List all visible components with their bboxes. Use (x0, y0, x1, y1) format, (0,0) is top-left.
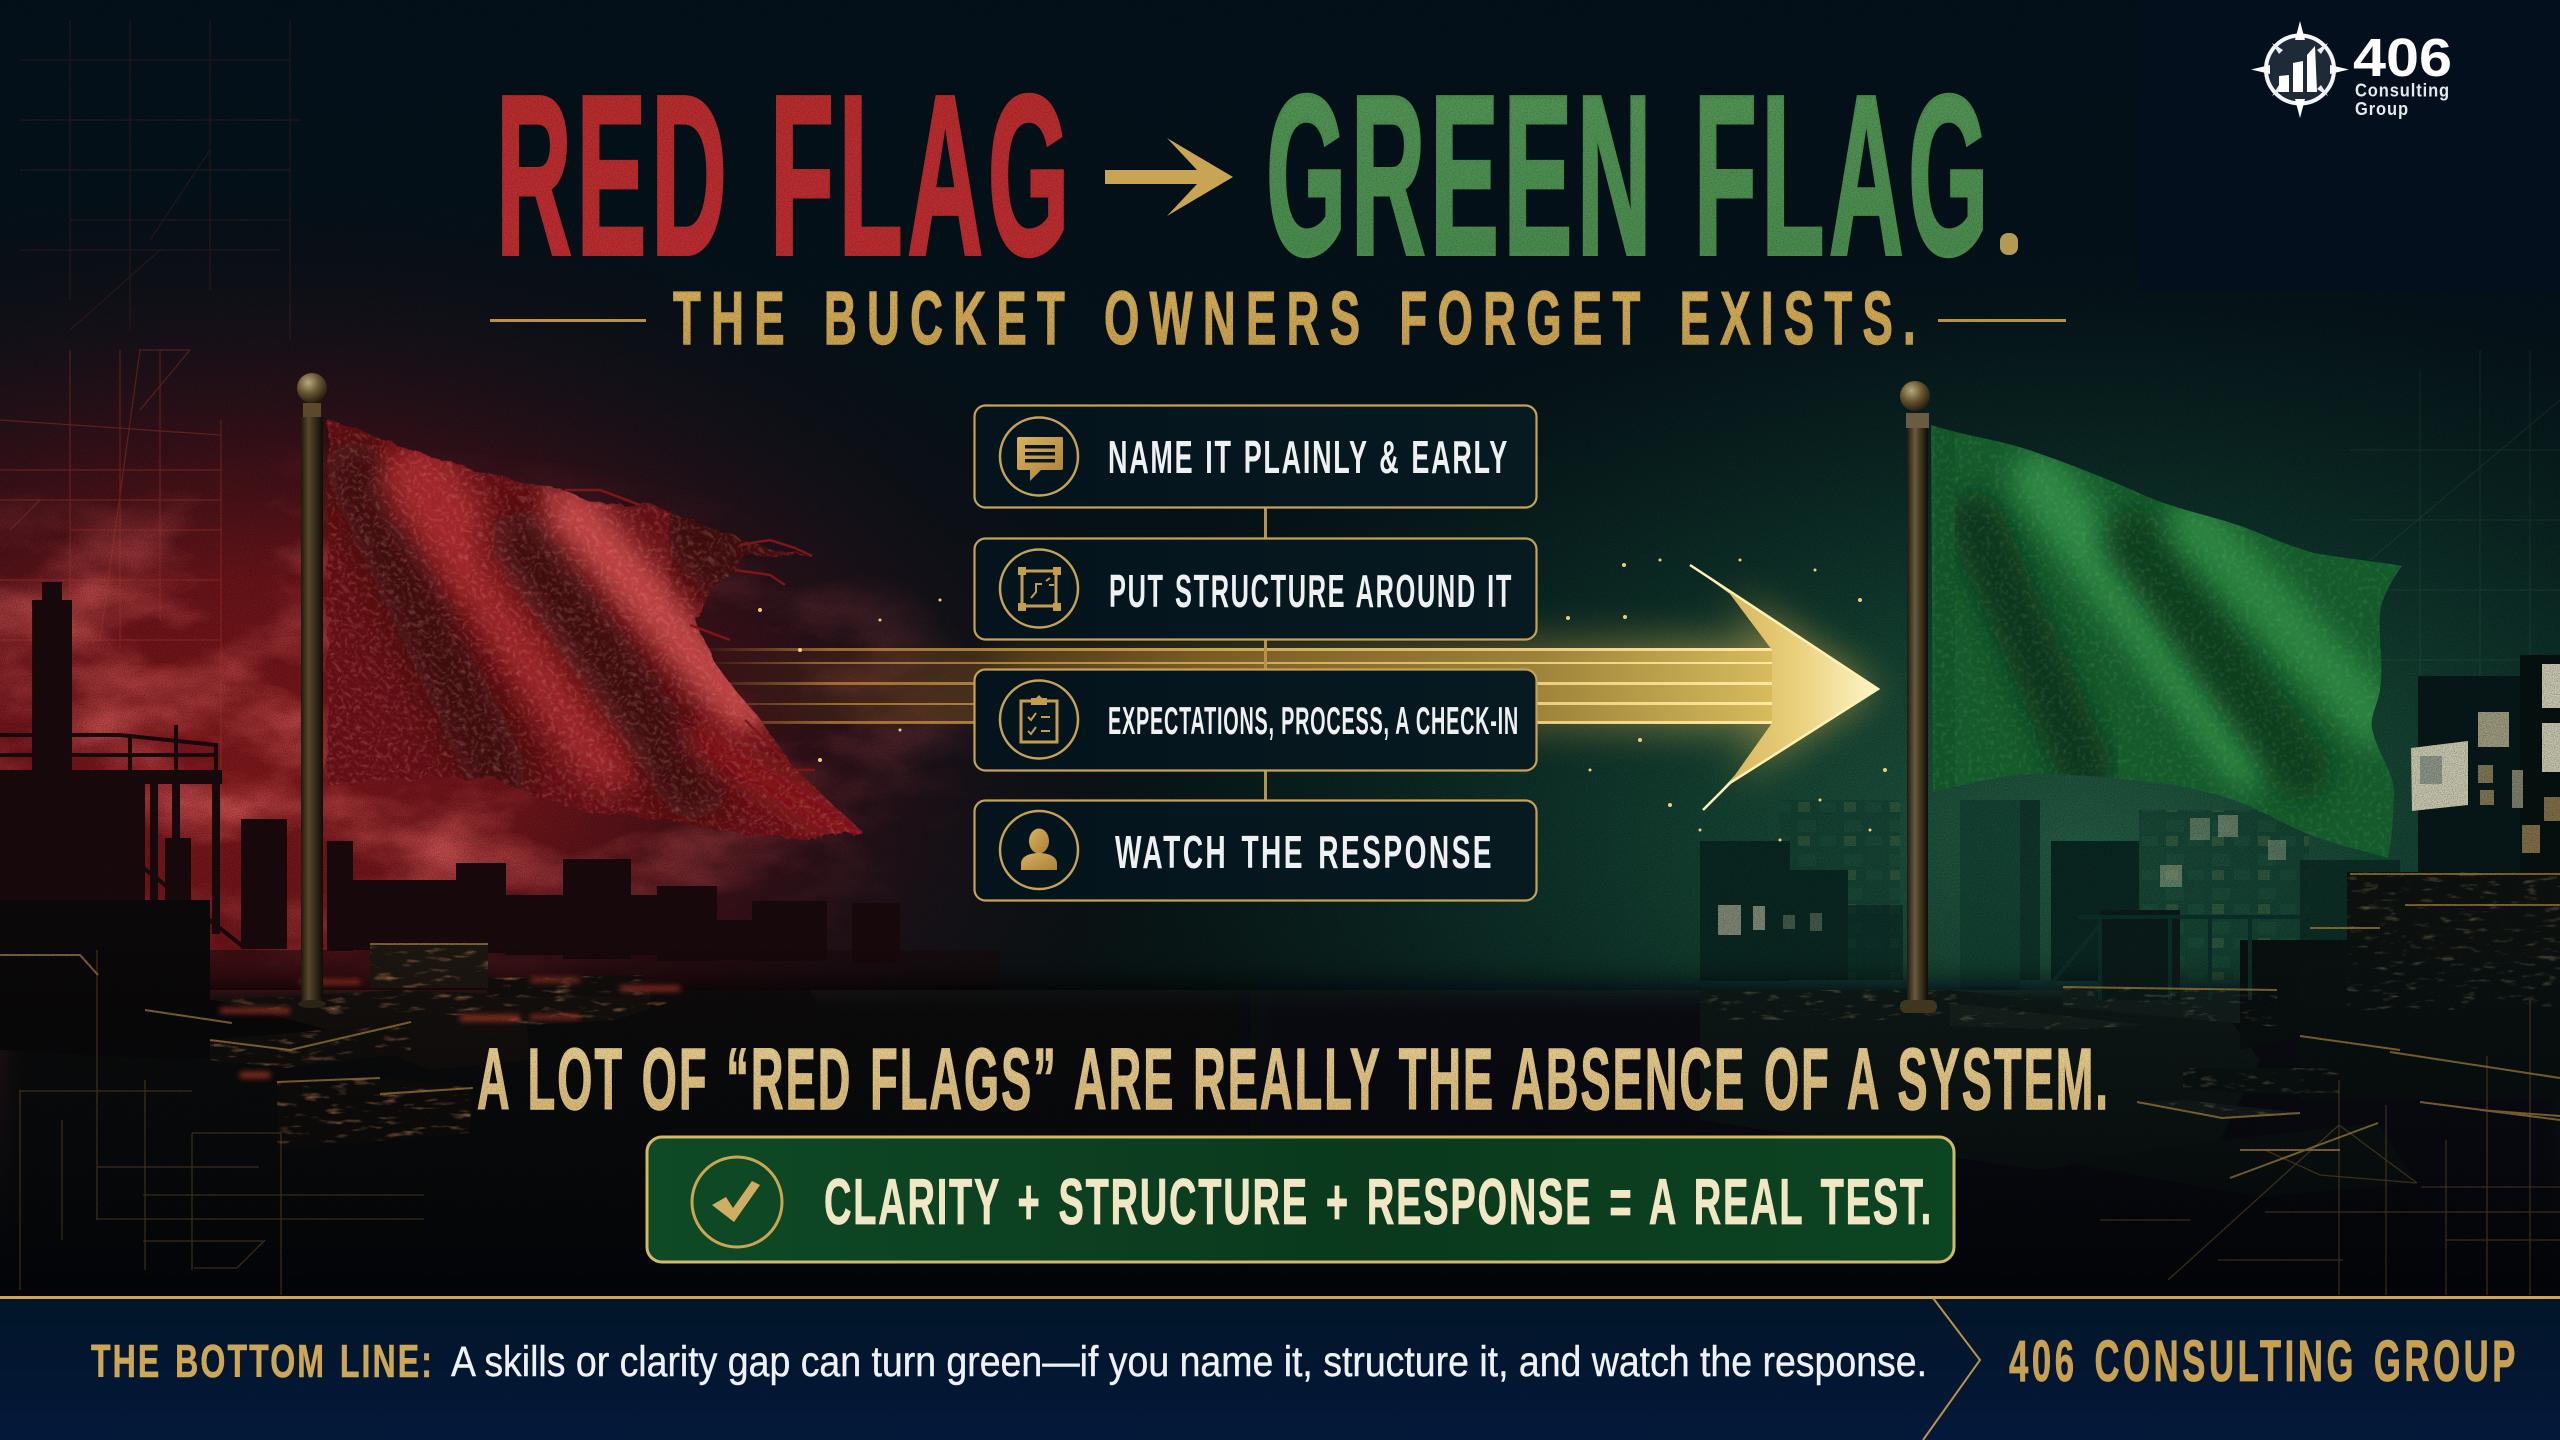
title arrow (1105, 138, 1233, 216)
step card: structure (974, 538, 1536, 640)
icon: structure frame (1000, 550, 1078, 628)
paper posters in green city (1718, 815, 2286, 935)
step card: response (974, 800, 1536, 900)
right foreground blocks (1250, 872, 2560, 1320)
block surface texture (210, 945, 668, 1144)
bottom line label: THE BOTTOM LINE: (91, 1335, 434, 1387)
green flag cloth (1920, 420, 2410, 870)
bottom line sentence: A skills or clarity gap can turn green—if you name it, structure it, and watch the response. (451, 1338, 1927, 1386)
step connectors (1264, 508, 1267, 801)
right wall with notices (2411, 655, 2560, 876)
chevron divider (1923, 1298, 1980, 1440)
left platform railings (0, 610, 245, 948)
logo: Consulting (2355, 80, 2450, 100)
blueprint lines: left (0, 350, 221, 840)
step text: EXPECTATIONS, PROCESS, A CHECK-IN (1108, 700, 1519, 743)
step card: expectations (974, 670, 1536, 770)
gold particles (758, 558, 1887, 842)
logo text: 406 (2353, 28, 2452, 88)
subtitle (490, 276, 2066, 360)
green flag (1900, 381, 2410, 1013)
ember highlights on red blocks (220, 978, 680, 1078)
logo: Group (2355, 98, 2409, 119)
icon: check circle (692, 1157, 782, 1247)
green city silhouette (1700, 800, 2400, 990)
icon: person (1000, 811, 1078, 889)
title period (2000, 233, 2018, 255)
logo (2251, 21, 2452, 119)
step text: PUT STRUCTURE AROUND IT (1109, 565, 1513, 617)
right railing (2050, 917, 2305, 1000)
red flag pole (297, 373, 327, 1008)
formula callout (647, 1137, 1954, 1262)
lower blueprint lines (20, 950, 2560, 1295)
red flag tattered strands (565, 490, 815, 770)
step card: name it (974, 406, 1536, 508)
green flag pole (1900, 381, 1937, 1013)
right blueprint lines (2350, 350, 2560, 680)
logo panel background (2140, 0, 2560, 292)
left foreground blocks (0, 900, 1250, 1320)
title: red flag to green flag: RED FLAG (496, 49, 1074, 303)
step text: NAME IT PLAINLY & EARLY (1108, 431, 1509, 483)
step text: WATCH THE RESPONSE (1115, 826, 1494, 878)
bottom banner (0, 1296, 2560, 1440)
logo compass (2251, 21, 2349, 118)
flow arrow: gold (700, 558, 1887, 842)
red skyline silhouette (0, 582, 1000, 990)
red flag (297, 373, 900, 1008)
gold edge highlights (0, 874, 2560, 1178)
icon: clipboard (1000, 680, 1078, 758)
red flag cloth (325, 420, 864, 840)
icon: speech bubble (1000, 418, 1078, 496)
